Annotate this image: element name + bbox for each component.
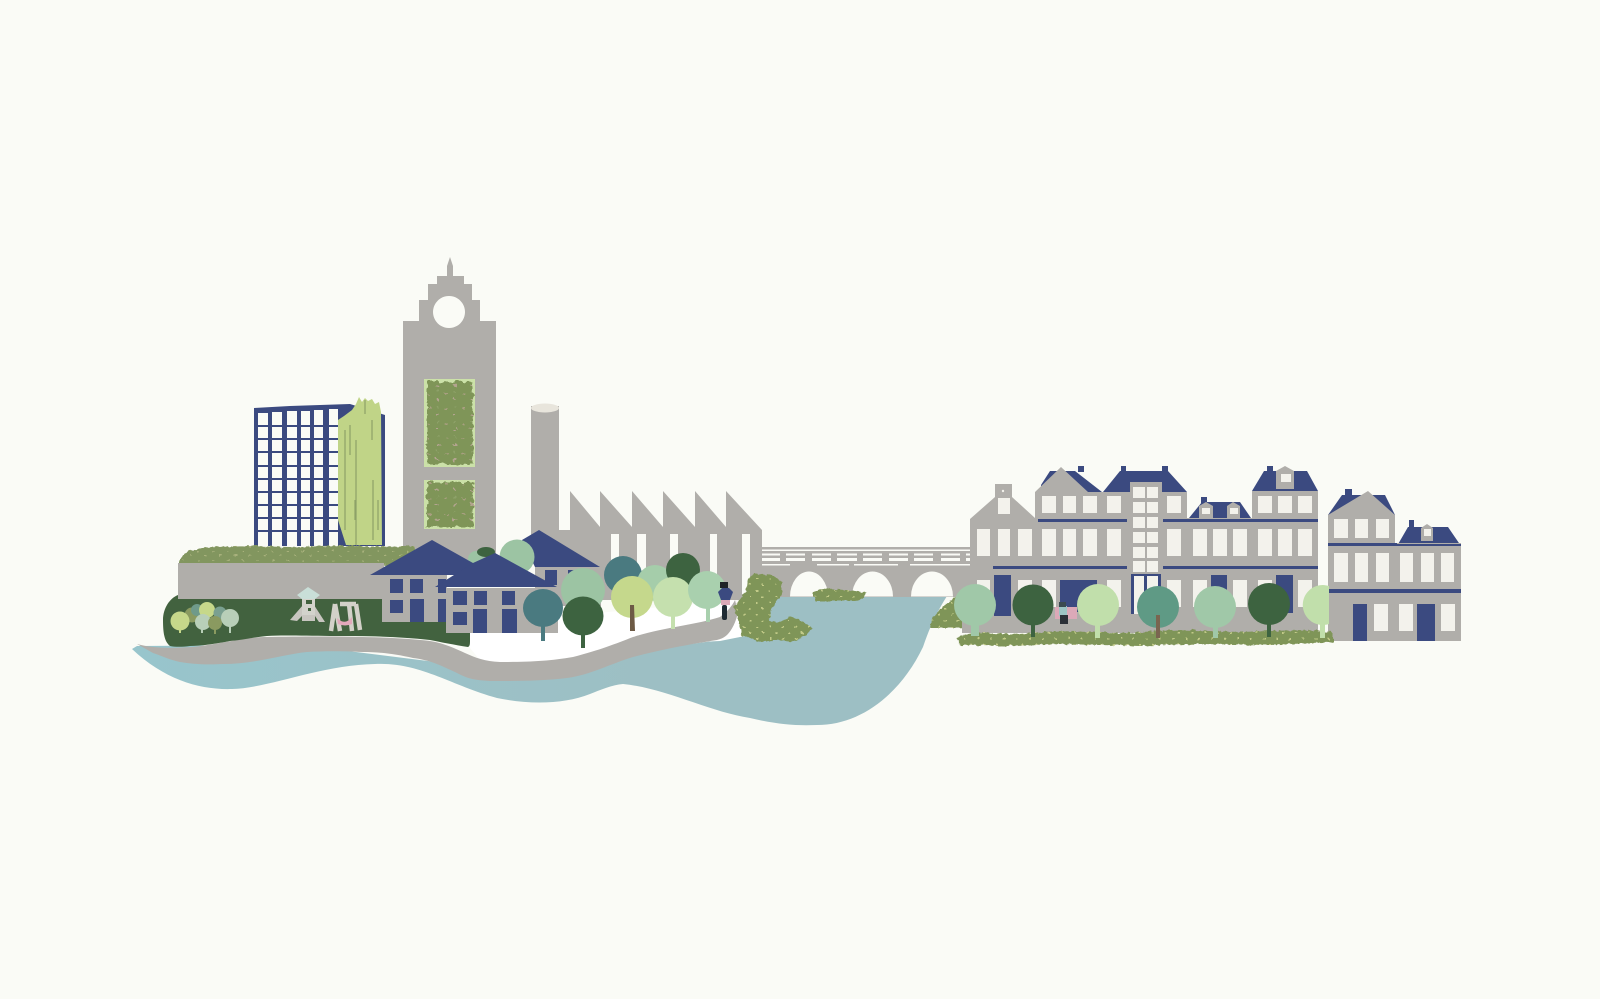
right corner townhouse [1328,489,1461,641]
person on bench [1055,602,1077,624]
playground lawn [163,595,470,647]
facade [962,467,1318,633]
green roof terrace [178,546,415,566]
river [132,596,947,725]
tree: teal [523,589,563,641]
green cypress facade [338,397,382,545]
foliage behind houses [468,540,534,574]
cyclist [718,582,733,620]
tree row, right bank [954,583,1329,638]
tree: sage 2 [1194,586,1236,638]
dormers [1199,466,1294,518]
house B [435,553,558,633]
tree: pale green [653,577,693,629]
gable vent [1002,490,1004,492]
sawtooth factory [559,491,762,600]
tree: dark 2 [1248,583,1290,637]
central roofs [1041,466,1318,518]
navy string courses [993,519,1318,569]
white ground under trees [470,600,745,670]
tree: sage [688,571,726,622]
glazed entrance [1131,574,1161,614]
tree: dark 1 [1012,584,1054,637]
terrace wall [178,563,384,599]
tree: pale 1 [1077,584,1119,638]
factory chimney [531,404,559,546]
windows [977,487,1312,607]
tree row, left bank [523,553,726,648]
tower green wall lower [424,480,475,529]
blue glass tower [254,404,385,546]
tree: sage 1 [954,584,996,636]
tree: dark green [562,596,604,648]
hedge along townhouses [957,630,1333,646]
stone arch bridge [760,547,972,597]
clock tower [403,257,496,560]
playground swings [331,604,360,631]
riverside walking path [137,600,738,681]
house behind, navy roof [522,530,601,606]
house A [370,540,490,622]
doors [994,575,1293,616]
tower green wall upper [424,379,475,467]
playground trees [170,602,239,634]
playground climbing frame [290,587,325,622]
terraced townhouses [962,466,1318,633]
riverbank bushes [734,574,965,642]
tree: lime [611,576,653,631]
tree: jade [1137,586,1179,638]
tree: pale 2 [1303,585,1329,638]
